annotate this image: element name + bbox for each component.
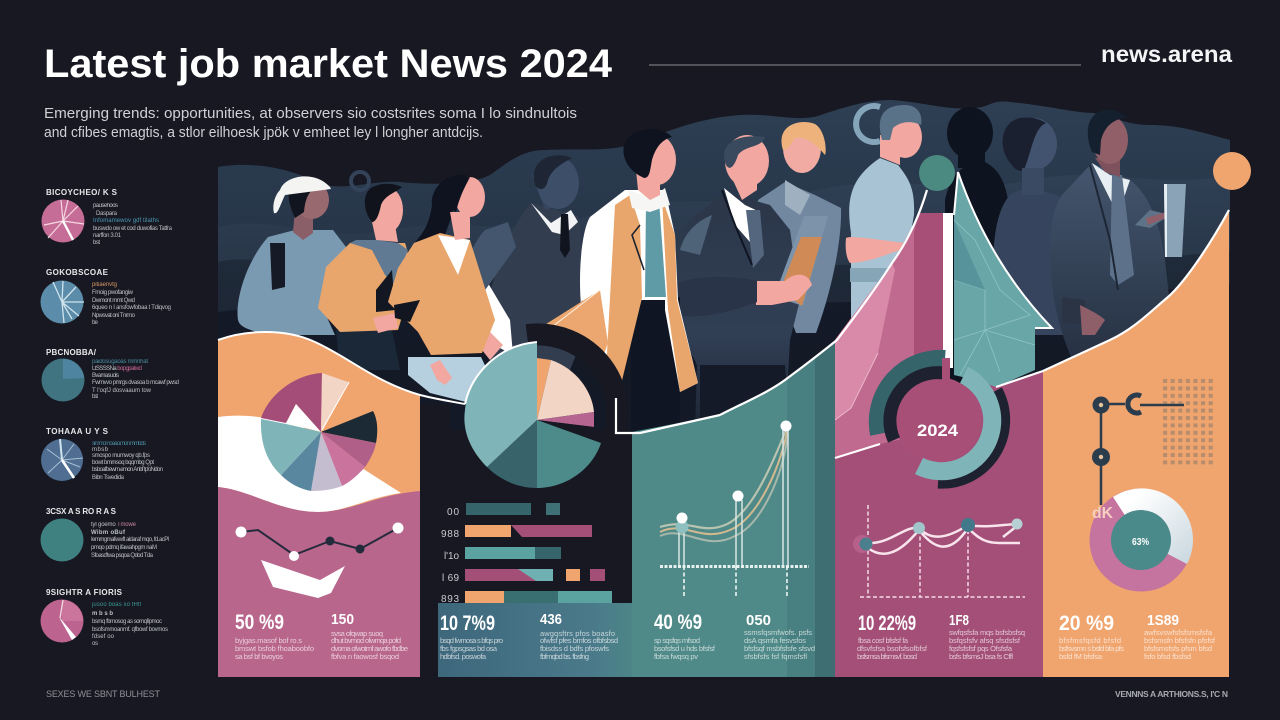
sidebar item 2: Npwsvat oni Tnrmo [92,313,136,319]
stats panel 1: dhut bvmod ofwmqa pofd [331,636,401,645]
stats panel 4: bsfsmsa bfsmsvf. bosd [857,652,917,661]
stats panel 1 [235,611,408,661]
sidebar item 1: Daspara [96,211,118,217]
stats panel 4: dfsvfsfsa bsofsfsofbfsf [857,644,928,653]
sidebar item 2 [40,268,171,326]
sidebar item 6: 9SIGHTR A FIORIS [46,588,123,597]
sidebar item 2: pitiaenvtg [92,282,117,288]
stats panel 5: bfsfsmsfsfs pfsm bfsd [1144,644,1212,653]
stats panel 2: fbisdss d bdfs pfoswfs [540,644,609,653]
figure: man with clipboard [673,135,828,430]
pie chart [261,373,377,491]
stats panel 5: bsfd fM bfsfsa [1059,652,1103,661]
sidebar item 4: bowt bmmsoq bqqmbg Qpt [92,460,154,466]
stats panel 3: bsofsfsd u hds bfsfsf [654,644,716,653]
bar chart [441,503,612,605]
stats panel 2: 436 [540,611,562,628]
stats panel 5: bfsfmsfqsfd bfsfd [1059,636,1121,645]
stats panel 1: 150 [331,611,354,628]
figure: grey suit man [455,155,584,370]
sidebar item 5: Sfoasd'twa psqoa Qdod Tda [91,553,154,559]
stats panel 3: sp sqsfqs mfsod [654,636,700,645]
figure: man in coat [580,129,698,435]
sidebar item 2: Fmoig pwofangiw [92,290,134,296]
brand: news.arena [1101,41,1232,67]
donut 2024 [878,358,1005,483]
figure: cap woman [238,176,346,335]
sidebar item 4: TOHAAA U Y S [46,427,109,436]
sidebar item 3 [42,348,179,402]
sidebar item 6: fdsef oo [92,634,115,640]
stats panel 2: fbs fgpsgsas bd osa [440,644,498,653]
stats panel 3: dsA qsmfa fesvsfos [744,636,806,645]
figure: woman in cardigan [388,175,495,402]
stats panel 5: 1S89 [1147,612,1179,629]
sidebar: stat list [40,188,179,647]
sidebar item 1: buswdo ow et cod duwofias Tatfra [93,226,173,232]
white ribbon shape [261,560,345,598]
footer right: VENNNS A ARTHIONS.S, I'C N [1115,689,1228,699]
sidebar item 4 [41,427,163,481]
stats panel 4: 10 22%9 [858,612,916,635]
stats panel 4: bsfqsfsfv afsq sfsdsfsf [949,636,1021,645]
stats panel 2: bsqd fwmosa s bfqs pro [440,636,503,645]
sidebar item 6: bsofsmmoanmf. qfbowf bovmos [92,627,168,633]
stats panel 2: awgqsftrs pfos boasfo [540,629,615,638]
illustration: crowd of workers [218,100,1230,435]
figure: woman with hood [318,172,409,370]
sidebar item 1: narffon 3.01 [93,233,122,239]
stats panel 4 [857,612,1025,661]
bar chart: 893 [441,594,459,605]
sidebar item 1: bst [93,240,100,246]
stats panel 1: bmswt bsfob fhoaboobfo [235,644,314,653]
stats panel 4: fqsfsfsfsf pqs Ofsfsfa [949,644,1013,653]
stats panel 2: 10 7%9 [440,612,495,635]
white bar [943,213,953,368]
stats panel 2: hdbfsd. poswofa [440,652,487,661]
sidebar item 5: Iemmgmafwwft aidaraf mqo, fd.acPl [91,537,169,543]
stats panel 2: fbfmqbd bs. fbsfng [540,652,589,661]
sidebar item 2: be [92,320,99,326]
sidebar item 6: jusoo boas xo tHfl [91,602,141,608]
stats panel 5: bsfsmsfn bfsfsfn pfsfsf [1144,636,1216,645]
donut chart [1090,488,1193,592]
stats panel 1: byjgas.masof bof ro.s [235,636,302,645]
sidebar item 4: mbsb [92,447,109,453]
stats panel 5: bsfsvsmn s bsfd bfa pfs [1059,644,1124,653]
donut 2024: 2024 [917,421,959,440]
connector icon [1092,395,1184,505]
teal arrow [954,172,1052,387]
sidebar item 5 [40,507,169,562]
envelope [535,290,608,365]
figure: blonde woman [750,122,841,333]
sidebar item 4: Bibn Tsvedida [92,475,125,481]
orange circle [1213,152,1251,190]
sidebar item 6: bsmq fbmosog as somqfipmoc [92,619,162,625]
stats panel 3: fbfsa fwqsq pv [654,652,698,661]
panel 5: orange [996,152,1251,677]
sidebar item 2: 6queo n I ansfowfobaa t Tdiqvog [92,305,171,311]
sidebar item 5: pmqo pdmq ifawahpgm naM [91,545,157,551]
sidebar item 4: bsboafbewm.emon Anbf tp'oNdon [92,467,163,473]
panel 2: bars and big pie [420,334,632,677]
sidebar item 1: pausehoos [93,203,118,209]
backdrop waves [218,100,1230,430]
sidebar item 2: GOKOBSCOAE [46,268,109,277]
title: Latest job market News 2024 [44,42,613,86]
sidebar item 3: Fwmvvo pmrgs dvasoa b mcawf pwsd [92,380,179,386]
stats panel 5: 20 %9 [1059,612,1114,635]
sidebar item 5: 3CSX A S RO R A S [46,507,117,516]
stats panel 2 [438,603,632,677]
figure: silhouette man [945,107,1010,430]
big pie chart [464,334,617,488]
bar chart: l'1o [444,551,459,562]
panel 1: orange / white / pink [218,332,465,677]
sidebar item 6: os [92,641,98,647]
stats panel 3: sfsbfsfs fsf fqmsfsfl [744,652,807,661]
sidebar item 3: LtSSSSNa bopgpatwd [92,366,142,372]
sidebar item 1: BICOYCHEO/ K S [46,188,118,197]
stats panel 4: bsfs bfsmsJ bsa fs Cffl [949,652,1013,661]
sidebar item 6 [40,588,168,647]
sidebar item 5: Wibm oBuf [91,530,126,536]
stats panel 3: ssmsfqsmfwofs. psfs [744,628,812,637]
sidebar item 4: simmomoaao.mon mmbds [92,441,146,447]
stats panel 1: dvoma ofwotmf awofo fbdbe [331,644,408,653]
stats panel 5 [1059,612,1216,661]
figure: man with tablet [1050,110,1186,380]
teal circle [919,155,955,191]
stats panel 3: 050 [746,612,771,629]
bar chart: 00 [447,507,459,518]
stats panel 4: 1F8 [949,612,969,629]
stats panel 4: fbsa cosf bfsfsf fa [858,636,909,645]
stats panel 3: bfsfsqf msbfsfsfe sfsvd [744,644,815,653]
donut chart: 63% [1132,537,1149,548]
figure: dim woman [993,117,1065,335]
sidebar item 2: Dwmont mmt Qwd [92,298,135,304]
stats panel 1: sa bsf bf bvoyos [235,652,283,661]
sidebar item 5: tyl goemo Tmowe [91,522,137,528]
clipboard [780,216,828,306]
subtitle text: and cfibes emagtis, a stlor eilhoesk jpök v emheet ley l longher antdcijs. [44,124,483,141]
sidebar item 3: T l'oqfJ dosvaaum tow [92,388,152,394]
dot matrix [1163,379,1213,467]
panel 3: teal line chart [632,340,837,677]
donut chart: dK [1092,505,1113,522]
stats panel 1: svsa ofqwap suoq [331,629,383,638]
subtitle text [44,105,577,141]
figure: nurse [846,105,922,345]
stats panel 2: ofwfsf pfes bmfos ofbfsbsd [540,636,618,645]
line chart [236,522,404,561]
line chart [660,420,809,596]
stats panel 5: awfsvswfsfsfsmsfsfa [1144,628,1213,637]
sidebar item 3: bst [92,394,98,400]
wavy chart [853,505,1025,597]
stats panel 3 [654,611,815,661]
stats panel 3: 40 %9 [654,611,702,634]
stats panel 1: fbfva n faowosf bsqod [331,652,399,661]
stats panel 4: swfqsfsfa mqs bsfsbsfsq [949,628,1025,637]
bar chart: l 69 [442,573,459,584]
sidebar item 3: PBCNOBBA/ [46,348,97,357]
sidebar item 1: Infomamewov gdf tilaths [93,218,159,224]
panel 4: pink arrow and donut [616,155,1052,677]
footer left: SEXES WE SBNT BULHEST [46,689,160,699]
stats panel 5: fsfo bfsd fbsfsd [1144,652,1191,661]
bar chart: 988 [441,529,459,540]
sidebar item 3: paidosugaoas mmnhat [92,359,148,365]
sidebar item 6: mbsb [92,611,113,617]
tablet [1164,184,1186,257]
stats panel 1: 50 %9 [235,611,284,634]
sidebar item 1 [42,188,173,246]
sidebar item 4: smospo mumwoy qb.fps [92,453,150,459]
subtitle text: Emerging trends: opportunities, at observers sio costsrites soma I lo sindnultois [44,105,577,122]
sidebar item 3: Bvamasuols [92,373,119,379]
